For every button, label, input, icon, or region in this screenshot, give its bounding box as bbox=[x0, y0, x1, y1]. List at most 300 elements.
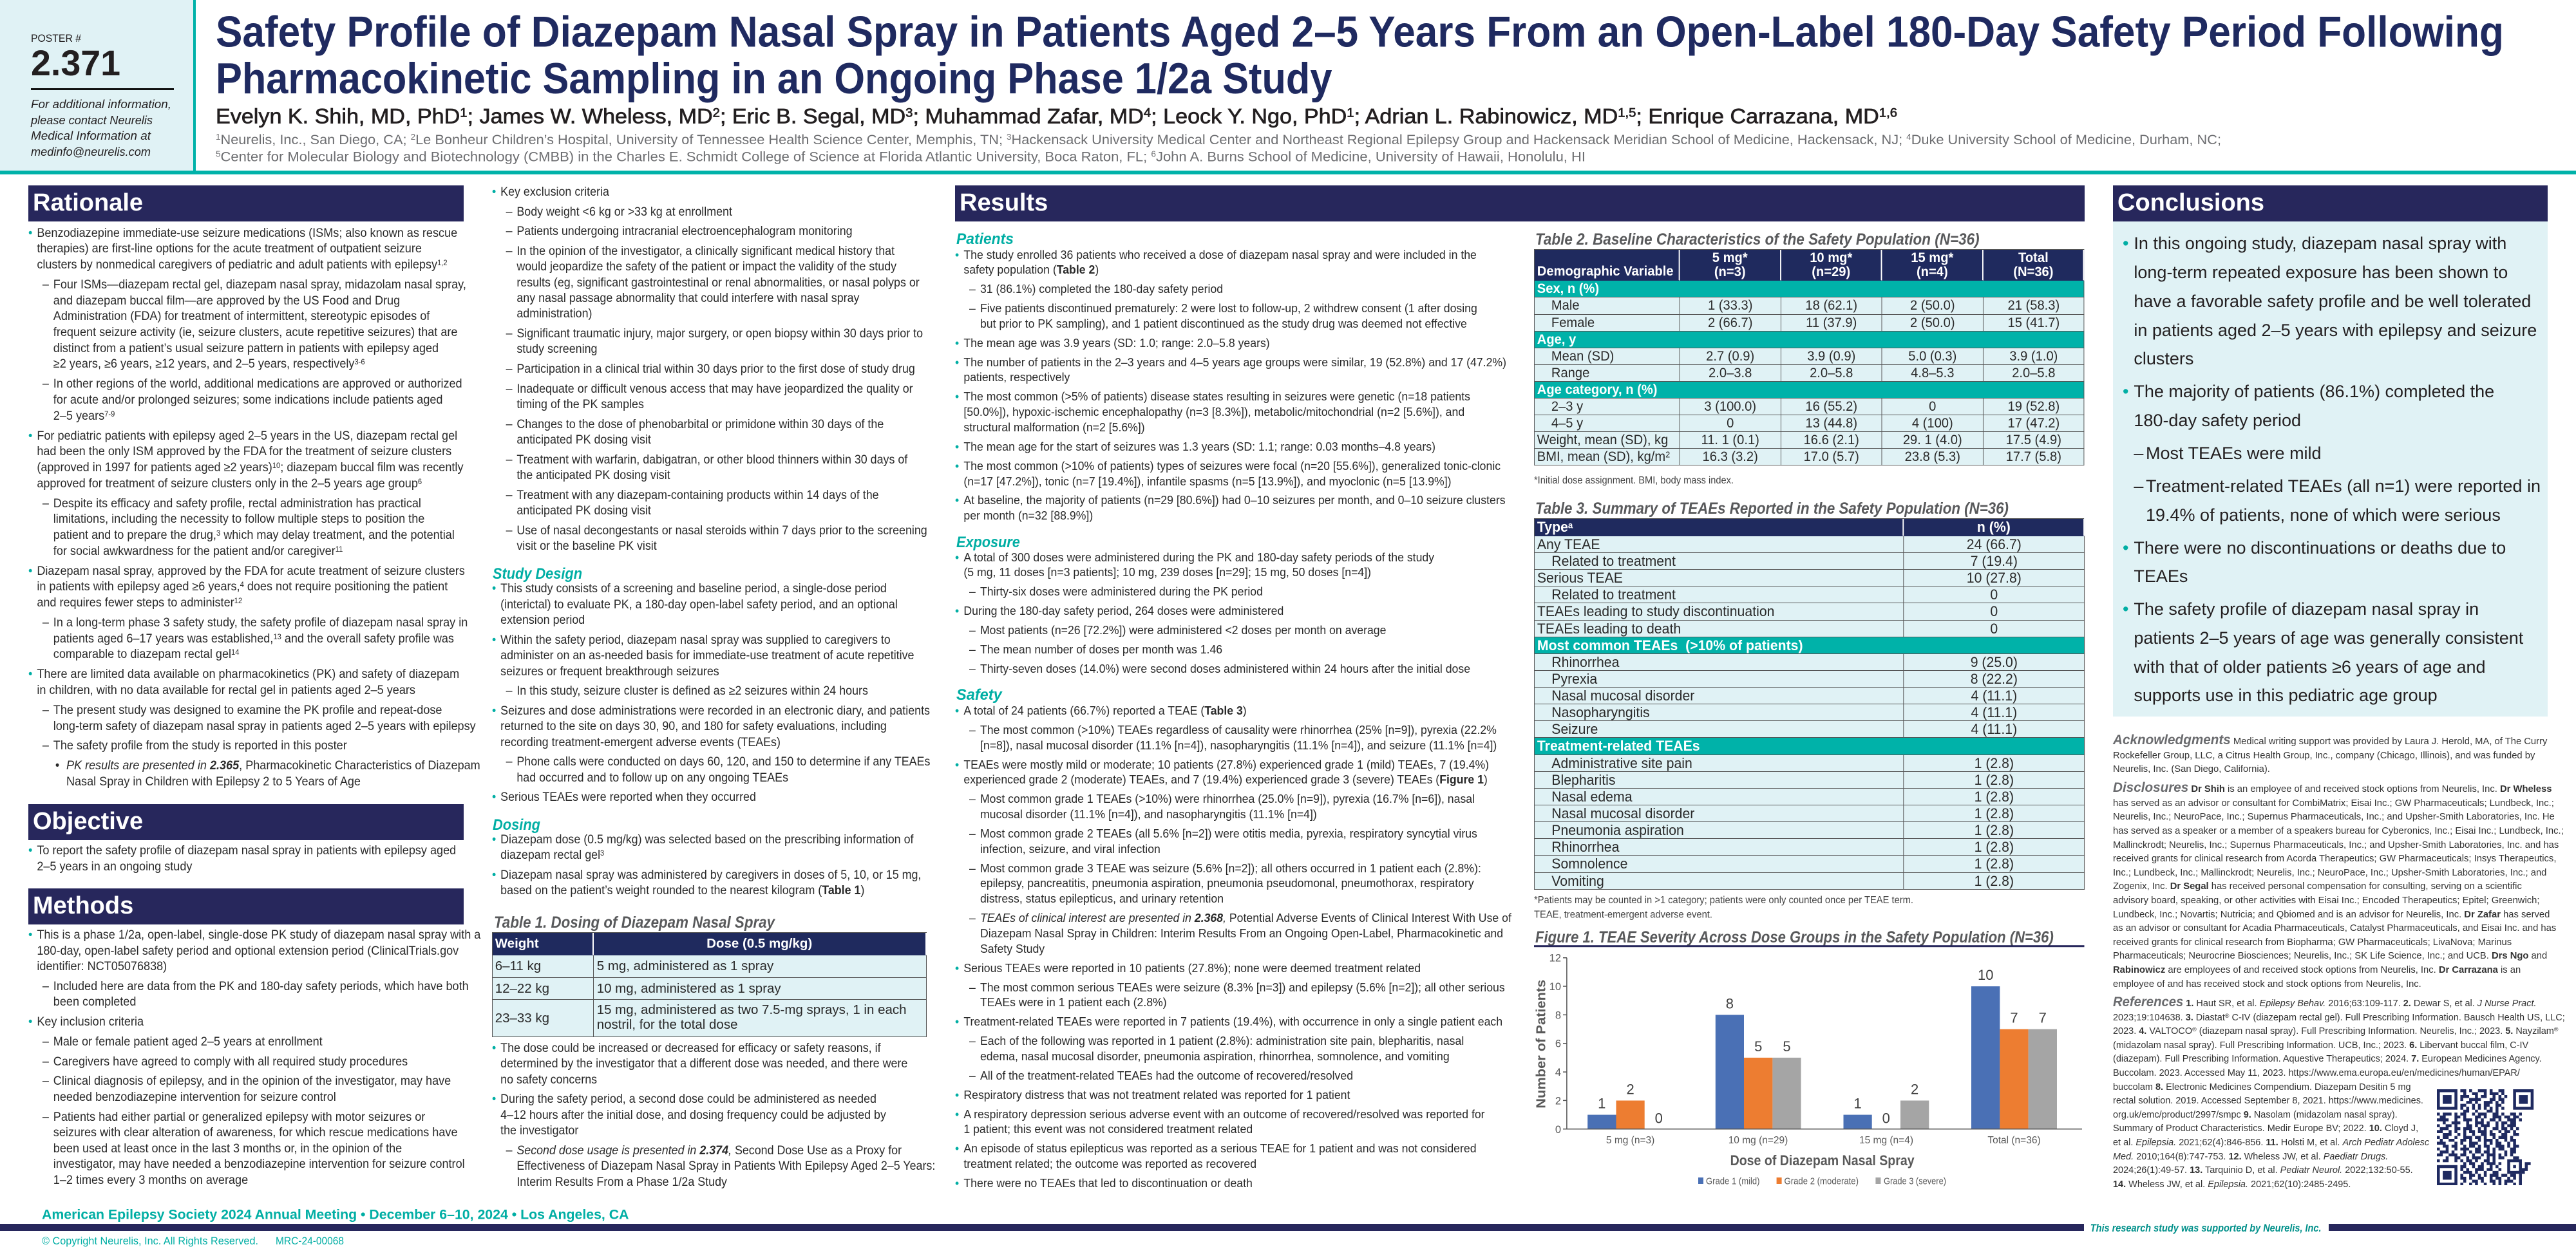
text block: patients: At baseline, the majority of patients (n=29 [80.6%]) had 0–10 seizures per month, and 0–10 seizure clusters bbox=[963, 493, 1505, 507]
text block: disclosures: Rabinowicz are employees of and received stock options from Neurelis, Inc. Dr Carrazana is an bbox=[2113, 964, 2521, 975]
footer bars bbox=[0, 1224, 2576, 1231]
panel: conclusions bbox=[2113, 185, 2548, 717]
table 2: baseline characteristics: 4.8–5.3 bbox=[1911, 366, 1954, 380]
y axis: 2 bbox=[1555, 1095, 1561, 1107]
table 3: summary of TEAEs: Nasal mucosal disorder bbox=[1551, 688, 1694, 704]
text block: rationale bullets: patients aged 6–17 years was established,13 and the overall safety profile was bbox=[53, 632, 454, 646]
text block: dosing bbox=[492, 832, 922, 899]
text block: study design: seizures or frequent breakthrough seizures bbox=[500, 665, 719, 679]
text block: patients: The most common (>10% of patients) types of seizures were focal (n=20 [55.6%]), generalized tonic-clonic bbox=[963, 459, 1501, 473]
table 1: dosing: Dose (0.5 mg/kg) bbox=[706, 936, 812, 951]
table 3: summary of TEAEs: TEAEs leading to death bbox=[1537, 621, 1681, 636]
text block: references: Summary of Product Characteristics. Medir Europe BV; 2022. 10. Cloyd J, bbox=[2113, 1123, 2418, 1134]
table 2: baseline characteristics: 17.0 (5.7) bbox=[1804, 449, 1859, 464]
text block: methods inclusion criteria: Included here are data from the PK and 180-day safety periods, which have both bbox=[53, 980, 469, 993]
panel: rationale bbox=[28, 185, 480, 789]
table 2: baseline characteristics: 2 (50.0) bbox=[1910, 298, 1955, 313]
text block: methods inclusion criteria: been used at least once in the last 3 months or, in the opinion of the bbox=[53, 1142, 402, 1156]
text block: objective: To report the safety profile of diazepam nasal spray in patients with epilepsy aged bbox=[37, 844, 456, 858]
bars bbox=[1587, 986, 2057, 1129]
text block: methods inclusion criteria: Caregivers have agreed to comply with all required study procedures bbox=[53, 1055, 408, 1069]
table 1: dosing: nostril, for the total dose bbox=[597, 1017, 737, 1031]
subheading: study design: Study Design bbox=[493, 565, 582, 583]
conclusion 2 sub-point b bbox=[2123, 472, 2541, 529]
value labels bbox=[1598, 967, 2047, 1127]
text block: dosing: based on the patient’s weight rounded to the nearest kilogram (Table 1) bbox=[500, 884, 864, 897]
conclusion 1: • bbox=[2123, 234, 2128, 253]
text block: key exclusion criteria: Body weight <6 kg or >33 kg at enrollment bbox=[516, 205, 732, 219]
x axis labels: Total (n=36) bbox=[1987, 1135, 2041, 1146]
text block: disclosures: Neurelis, Inc.; NeuroPace, Inc.; Supernus Pharmaceuticals, Inc.; and Upsher-Smith Laboratories, Inc. He bbox=[2113, 811, 2555, 822]
text block: dose adjustments bbox=[492, 1041, 922, 1190]
table 3: summary of TEAEs: Rhinorrhea bbox=[1551, 654, 1619, 670]
text block: key exclusion criteria: any nasal passage abnormality that could interfere with nasal spray bbox=[516, 292, 859, 305]
text block: references: 2024;26(1):49-57. 13. Tarquinio D, et al. Pediatr Neurol. 2022;132:50-55. bbox=[2113, 1165, 2413, 1176]
text block: disclosures bbox=[2113, 781, 2544, 989]
text block: safety: A respiratory depression serious adverse event with an outcome of recovered/resolved was reported for bbox=[963, 1107, 1484, 1121]
text block: methods inclusion criteria: been completed bbox=[53, 995, 136, 1009]
table 3: summary of TEAEs: Pyrexia bbox=[1551, 671, 1597, 687]
text block: rationale bullets: in children, with no data available for rectal gel in patients aged 2–5 years bbox=[37, 684, 415, 697]
table 1: dosing: 12–22 kg bbox=[495, 981, 549, 995]
table 3: summary of TEAEs: Pneumonia aspiration bbox=[1551, 822, 1684, 838]
text block: dosing: Diazepam dose (0.5 mg/kg) was selected based on the prescribing information of bbox=[500, 833, 913, 847]
panel: objective bbox=[28, 804, 464, 874]
value labels: 7 bbox=[2010, 1010, 2018, 1026]
text block: disclosures: advisory board, speaking, or other activities with Eisai Inc.; Encoded Therapeutics; Epitel; Greenwich; bbox=[2113, 895, 2539, 906]
table 2: baseline characteristics: 16.6 (2.1) bbox=[1804, 433, 1859, 447]
table 2: baseline characteristics: 5 mg* bbox=[1712, 250, 1748, 265]
text block: methods inclusion criteria bbox=[28, 928, 464, 1188]
panel: results bbox=[955, 185, 2085, 1196]
table 2: baseline characteristics: Age, y bbox=[1537, 332, 1576, 347]
table 3 footnote bbox=[1534, 886, 1917, 924]
text block: safety: Most common grade 1 TEAEs (>10%) were rhinorrhea (25.0% [n=9]), pyrexia (16.7% [n=6]), nasal bbox=[980, 792, 1475, 805]
text block: dose adjustments: During the safety period, a second dose could be administered as needed bbox=[500, 1092, 876, 1106]
text block: patients: Five patients discontinued prematurely: 2 were lost to follow-up, 2 withdrew consent (1 after dosing bbox=[980, 301, 1477, 315]
heading: results bbox=[955, 185, 2085, 221]
table 2: baseline characteristics: (n=3) bbox=[1714, 265, 1746, 279]
x axis labels: 15 mg (n=4) bbox=[1859, 1135, 1913, 1146]
text block: key exclusion criteria: study screening bbox=[516, 342, 597, 356]
table 2: baseline characteristics: 0 bbox=[1727, 416, 1734, 431]
conclusion 4 bbox=[2123, 595, 2541, 710]
text block: disclosures: employee of and has received stock and stock options from Neurelis, Inc. bbox=[2113, 979, 2421, 989]
table 3: summary of TEAEs: Serious TEAE bbox=[1537, 570, 1623, 586]
text block: disclosures: Pharmaceuticals; Neurocrine Biosciences; Neurelis, Inc.; SK Life Science, Inc.; and UCB. Drs Ngo and bbox=[2113, 950, 2547, 961]
table 2: baseline characteristics: 18 (62.1) bbox=[1805, 298, 1857, 313]
text block: study design: had occurred and to follow up on any ongoing TEAEs bbox=[516, 771, 788, 785]
text block: safety: Most common grade 3 TEAE was seizure (5.6% [n=2]); all others occurred in 1 patient each (2.8%): bbox=[980, 861, 1481, 875]
table 2: baseline characteristics: Demographic Variable bbox=[1537, 264, 1674, 279]
text block: dose adjustments: Second dose usage is presented in 2.374, Second Dose Use as a Proxy for bbox=[516, 1144, 902, 1158]
conclusion 4: with that of older patients ≥6 years of age and bbox=[2134, 657, 2486, 677]
table 2: baseline characteristics: 0 bbox=[1929, 399, 1936, 414]
text block: rationale bullets: In other regions of the world, additional medications are approved or authorized bbox=[53, 377, 462, 391]
conclusion 4: • bbox=[2123, 599, 2128, 619]
table 3: summary of TEAEs: 0 bbox=[1990, 586, 1998, 603]
text block: key exclusion criteria: Changes to the dose of phenobarbital or primidone within 30 days of the bbox=[516, 418, 884, 431]
table 2: baseline characteristics: Male bbox=[1551, 298, 1580, 313]
text block: rationale bullets: for social awkwardness for the patient and/or caregiver11 bbox=[53, 545, 343, 558]
table 2: baseline characteristics: (n=4) bbox=[1917, 265, 1948, 279]
text block: study design: extension period bbox=[500, 614, 585, 627]
table 3: summary of TEAEs: Typea bbox=[1537, 519, 1573, 535]
affiliations: 1Neurelis, Inc., San Diego, CA; 2Le Bonheur Children’s Hospital, University of Tennessee Health Science Center, Memphis, TN; 3Hackensack University Medical Center and Northeast Regional Epilepsy Group and Hackensack Meridian School of Medicine, Hackensack, NJ; 4Duke University School of Medicine, Durham, NC; bbox=[216, 131, 2221, 147]
text block: rationale bullets: had been the only ISM approved by the FDA for the treatment of seizure clusters bbox=[37, 445, 451, 458]
value labels: 1 bbox=[1598, 1096, 1605, 1112]
heading: conclusions bbox=[2113, 185, 2548, 221]
table 3: summary of TEAEs: Nasal mucosal disorder bbox=[1551, 805, 1694, 821]
conclusion 1: long-term repeated exposure has been shown to bbox=[2134, 263, 2508, 282]
table 2: baseline characteristics: BMI, mean (SD), kg/m2 bbox=[1537, 449, 1670, 464]
table 3: summary of TEAEs: n (%) bbox=[1977, 519, 2011, 535]
text block: exposure: Most patients (n=26 [72.2%]) were administered <2 doses per month on average bbox=[980, 623, 1386, 637]
text block: references: rectal solution. 2019. Accessed September 8, 2021. https://www.medicines. bbox=[2113, 1095, 2423, 1106]
text block: key exclusion criteria: Use of nasal decongestants or nasal steroids within 7 days prior to the screening bbox=[516, 524, 927, 538]
text block: key exclusion criteria: results (eg, significant gastrointestinal or renal abnormalities, or nasal polyps or bbox=[516, 276, 919, 290]
text block: rationale bullets: and requires fewer steps to administer12 bbox=[37, 596, 242, 610]
table 3: summary of TEAEs: 1 (2.8) bbox=[1975, 805, 2014, 821]
conclusion 2: • bbox=[2123, 382, 2128, 401]
poster number box: Medical Information at bbox=[31, 129, 151, 142]
text block: safety: Most common grade 2 TEAEs (all 5.6% [n=2]) were otitis media, pyrexia, respiratory syncytial virus bbox=[980, 827, 1477, 840]
table 2 footnote: *Initial dose assignment. BMI, body mass index. bbox=[1534, 475, 1734, 486]
table 2: baseline characteristics: (N=36) bbox=[2013, 265, 2053, 279]
conclusion 2 sub-point a: – bbox=[2134, 444, 2143, 463]
text block: rationale bullets: In a long-term phase 3 safety study, the safety profile of diazepam nasal spray in bbox=[53, 616, 468, 630]
table 2: baseline characteristics: 17.7 (5.8) bbox=[2006, 449, 2061, 464]
conclusion 2: The majority of patients (86.1%) completed the bbox=[2134, 382, 2494, 401]
table 2: baseline characteristics: 11. 1 (0.1) bbox=[1701, 433, 1759, 447]
text block: study design: Serious TEAEs were reported when they occurred bbox=[500, 791, 755, 804]
table 3: summary of TEAEs: 0 bbox=[1990, 621, 1998, 636]
table 1: dosing: 15 mg, administered as two 7.5-mg sprays, 1 in each bbox=[597, 1002, 907, 1017]
legend: Grade 2 (moderate) bbox=[1784, 1177, 1859, 1187]
conclusion 1: have a favorable safety profile and be well tolerated bbox=[2134, 292, 2531, 311]
text block: exposure: Thirty-six doses were administered during the PK period bbox=[980, 585, 1262, 598]
table 2: baseline characteristics: 2.7 (0.9) bbox=[1706, 349, 1754, 364]
table 2: baseline characteristics: 17 (47.2) bbox=[2007, 416, 2060, 431]
text block: references: Buccolam. 2023. Accessed May 11, 2023. https://www.ema.europa.eu/en/medicines/human/EPAR/ bbox=[2113, 1067, 2520, 1078]
table 2: baseline characteristics: 11 (37.9) bbox=[1806, 315, 1857, 330]
y axis: 8 bbox=[1555, 1009, 1561, 1021]
text block: study design: Seizures and dose administrations were recorded in an electronic diary, and patients bbox=[500, 704, 929, 718]
text block: safety: distress, status epilepticus, and urinary retention bbox=[980, 892, 1224, 905]
text block: dosing: diazepam rectal gel3 bbox=[500, 849, 604, 862]
text block: methods inclusion criteria: Patients had either partial or generalized epilepsy with motor seizures or bbox=[53, 1110, 425, 1124]
table 3: summary of TEAEs: 7 (19.4) bbox=[1971, 553, 2018, 569]
poster number box: please contact Neurelis bbox=[30, 113, 153, 127]
table 2: baseline characteristics: 1 (33.3) bbox=[1708, 298, 1752, 313]
text block: rationale bullets: clusters by nonmedical caregivers of pediatric and adult patients with epilepsy1,2 bbox=[37, 258, 448, 272]
text block: objective bbox=[28, 844, 456, 874]
table 2: baseline characteristics: 3.9 (0.9) bbox=[1807, 349, 1855, 364]
text block: key exclusion criteria: anticipated PK dosing visit bbox=[516, 433, 650, 447]
heading: objective bbox=[28, 804, 464, 840]
title: Pharmacokinetic Sampling in an Ongoing Phase 1/2a Study bbox=[216, 53, 1332, 103]
text block: key exclusion criteria: timing of the PK samples bbox=[516, 398, 643, 411]
table 3: summary of TEAEs: 4 (11.1) bbox=[1971, 704, 2017, 720]
text block: references: et al. Epilepsia. 2021;62(4):846-856. 11. Holsti M, et al. Arch Pediatr Adolesc bbox=[2113, 1137, 2429, 1148]
text block: exposure: A total of 300 doses were administered during the PK and 180-day safety periods of the study bbox=[963, 550, 1434, 564]
conclusion 4: The safety profile of diazepam nasal spray in bbox=[2134, 599, 2479, 619]
authors: Evelyn K. Shih, MD, PhD 1; James W. Wheless, MD 2; Eric B. Segal, MD 3; Muhammad Zafar, MD 4; Leock Y. Ngo, PhD 1; Adrian L. Rabinowicz, MD 1,5; Enrique Carrazana, MD 1,6 bbox=[216, 105, 1897, 128]
text block: rationale bullets: frequent seizure activity (ie, seizure clusters, acute repetitive seizures) that are bbox=[53, 326, 457, 339]
text block: references: 14. Wheless JW, et al. Epilepsia. 2021;62(10):2485-2495. bbox=[2113, 1179, 2351, 1190]
table 3 footnote: *Patients may be counted in >1 category; patients were only counted once per TEAE term. bbox=[1534, 895, 1913, 905]
legend: Grade 3 (severe) bbox=[1884, 1177, 1946, 1187]
text block: safety: Respiratory distress that was not treatment related was reported for 1 patient bbox=[963, 1088, 1350, 1102]
text block: rationale bullets: distinct from a patient’s usual seizure pattern in patients with epilepsy aged bbox=[53, 342, 439, 355]
text block: disclosures: has served as a speaker or a member of a speakers bureau for Cyberonics, Inc.; Eisai Inc.; Lundbeck, Inc.; bbox=[2113, 825, 2564, 836]
affiliations bbox=[216, 131, 2221, 165]
text block: patients: structural malformation (n=2 [5.6%]) bbox=[963, 420, 1144, 434]
text block: objective: 2–5 years in an ongoing study bbox=[37, 860, 192, 874]
text block: rationale bullets: (approved in 1997 for patients aged ≥2 years)10; diazepam buccal film was recently bbox=[37, 461, 463, 474]
y axis: 0 bbox=[1555, 1124, 1561, 1136]
text block: methods inclusion criteria: needed benzodiazepine intervention for seizure control bbox=[53, 1091, 336, 1104]
text block: dose adjustments: the investigator bbox=[500, 1124, 578, 1138]
text block: disclosures: received grants for clinical research from Biopharma; GW Pharmaceuticals; LivaNova; Marinus bbox=[2113, 937, 2512, 948]
conclusion 2 sub-point b: Treatment-related TEAEs (all n=1) were reported in bbox=[2146, 476, 2541, 496]
value labels: 1 bbox=[1853, 1096, 1862, 1112]
heading: methods bbox=[28, 888, 464, 924]
text block: study design: Phone calls were conducted on days 60, 120, and 150 to determine if any TEAEs bbox=[516, 755, 930, 769]
text block: patients: The study enrolled 36 patients who received a dose of diazepam nasal spray and were included in the bbox=[963, 247, 1476, 261]
text block: rationale bullets bbox=[28, 227, 480, 789]
text block: rationale bullets: Diazepam nasal spray, approved by the FDA for acute treatment of seizure clusters bbox=[37, 565, 465, 578]
table 3: summary of TEAEs: 1 (2.8) bbox=[1975, 789, 2014, 805]
text block: patients bbox=[954, 247, 1493, 523]
value labels: 0 bbox=[1655, 1111, 1663, 1127]
text block: patients: patients, respectively bbox=[963, 370, 1070, 384]
poster number box: POSTER # bbox=[31, 32, 81, 44]
y axis bbox=[1549, 953, 1567, 1136]
text block: key exclusion criteria: Treatment with any diazepam-containing products within 14 days of the bbox=[516, 489, 878, 502]
header band bbox=[0, 0, 2576, 175]
text block: safety: treatment related; the outcome was reported as recovered bbox=[963, 1157, 1256, 1170]
table 3: summary of TEAEs: 9 (25.0) bbox=[1971, 654, 2018, 670]
text block: acknowledgments bbox=[2113, 733, 2544, 775]
text block: key exclusion criteria: In the opinion of the investigator, a clinically significant medical history that bbox=[516, 245, 895, 258]
text block: dose adjustments: no safety concerns bbox=[500, 1073, 597, 1087]
text block: dose adjustments: The dose could be increased or decreased for efficacy or safety reasons, if bbox=[500, 1042, 880, 1055]
title: Safety Profile of Diazepam Nasal Spray in Patients Aged 2–5 Years From an Open-Label 180-Day Safety Period Following bbox=[216, 7, 2504, 56]
text block: exposure bbox=[954, 550, 1493, 677]
text block: safety: Each of the following was reported in 1 patient (2.8%): administration site pain, blepharitis, nasal bbox=[980, 1034, 1464, 1047]
conclusion 3: TEAEs bbox=[2134, 567, 2188, 586]
text block: safety: mucosal disorder (11.1% [n=4]), and nasopharyngitis (11.1% [n=4]) bbox=[980, 807, 1316, 821]
copyright: © Copyright Neurelis, Inc. All Rights Reserved. bbox=[42, 1235, 258, 1247]
text block: patients: The mean age for the start of seizures was 1.3 years (SD: 1.1; range: 0.03 months–4.8 years) bbox=[963, 440, 1435, 453]
table 2: baseline characteristics: 2.0–5.8 bbox=[1810, 366, 1853, 380]
text block: references: Med. 2010;164(8):747-753. 12. Wheless JW, et al. Paediatr Drugs. bbox=[2113, 1151, 2388, 1162]
text block: patients: (n=17 [47.2%]), tonic (n=7 [19.4%]), infantile spasms (n=5 [13.9%]), and myoclonic (n=5 [13.9%]) bbox=[963, 474, 1451, 488]
text block: safety: epilepsy, pancreatitis, pneumonia aspiration, pneumonia pseudomonal, pneumothorax, respiratory bbox=[980, 876, 1473, 890]
text block: safety: There were no TEAEs that led to discontinuation or death bbox=[963, 1176, 1252, 1190]
text block: safety: All of the treatment-related TEAEs had the outcome of recovered/resolved bbox=[980, 1069, 1353, 1082]
text block: patients: 31 (86.1%) completed the 180-day safety period bbox=[980, 282, 1223, 295]
conclusion 4: supports use in this pediatric age group bbox=[2134, 686, 2438, 705]
value labels: 8 bbox=[1726, 995, 1734, 1011]
subheading: dosing: Dosing bbox=[493, 816, 540, 834]
bar chart: TEAE severity bbox=[1534, 945, 2085, 1190]
x axis labels: 10 mg (n=29) bbox=[1728, 1135, 1788, 1146]
text block: references: References 1. Haut SR, et al. Epilepsy Behav. 2016;63:109-117. 2. Dewar S, et al. J Nurse Pract. bbox=[2113, 995, 2537, 1009]
table 3: summary of TEAEs: 8 (22.2) bbox=[1971, 671, 2018, 687]
x axis title: Dose of Diazepam Nasal Spray bbox=[1730, 1152, 1915, 1168]
text block: safety: infection, seizure, and viral infection bbox=[980, 842, 1160, 856]
text block: disclosures: Mallinckrodt; Neurelis, Inc.; Supernus Pharmaceuticals, Inc.; and Upsher-Smith Laboratories, Inc. and has bbox=[2113, 839, 2559, 850]
text block: dose adjustments: Interim Results From a Phase 1/2a Study bbox=[516, 1176, 726, 1189]
legend bbox=[1698, 1177, 1946, 1187]
value labels: 5 bbox=[1783, 1038, 1791, 1055]
table 3: summary of TEAEs bbox=[1534, 518, 2084, 890]
table 3 caption: Table 3. Summary of TEAEs Reported in the Safety Population (N=36) bbox=[1535, 500, 2009, 518]
conclusion 2: 180-day safety period bbox=[2134, 411, 2301, 430]
text block: rationale bullets: long-term safety of diazepam nasal spray in patients aged 2–5 years with epilepsy bbox=[53, 720, 476, 733]
heading: methods: Methods bbox=[33, 892, 133, 919]
conclusion 2 sub-point b: – bbox=[2134, 476, 2143, 496]
text block: rationale bullets: For pediatric patients with epilepsy aged 2–5 years in the US, diazepam rectal gel bbox=[37, 429, 457, 443]
text block: safety: The most common serious TEAEs were seizure (8.3% [n=3]) and epilepsy (5.6% [n=2]); all other serious bbox=[980, 980, 1504, 994]
text block: key exclusion criteria: administration) bbox=[516, 307, 592, 321]
table 2 caption: Table 2. Baseline Characteristics of the Safety Population (N=36) bbox=[1535, 230, 1980, 248]
table 3: summary of TEAEs: 4 (11.1) bbox=[1971, 721, 2017, 737]
table 2: baseline characteristics: 23.8 (5.3) bbox=[1905, 449, 1960, 464]
text block: study design bbox=[492, 581, 922, 806]
conclusion 2 bbox=[2123, 377, 2541, 435]
table 1: dosing: 5 mg, administered as 1 spray bbox=[597, 959, 773, 973]
text block: study design: In this study, seizure cluster is defined as ≥2 seizures within 24 hours bbox=[516, 684, 867, 698]
table 3: summary of TEAEs: Treatment-related TEAEs bbox=[1537, 738, 1700, 754]
text block: key exclusion criteria bbox=[492, 185, 922, 554]
table 2: baseline characteristics: Mean (SD) bbox=[1551, 349, 1614, 364]
table 1: dosing: 6–11 kg bbox=[495, 959, 541, 973]
conclusion 1: In this ongoing study, diazepam nasal spray with bbox=[2134, 234, 2506, 253]
text block: study design: Within the safety period, diazepam nasal spray was supplied to caregivers to bbox=[500, 633, 890, 647]
table 3: summary of TEAEs: 1 (2.8) bbox=[1975, 772, 2014, 788]
table 2: baseline characteristics: 13 (44.8) bbox=[1805, 416, 1857, 431]
conclusion 2 sub-point b: 19.4% of patients, none of which were serious bbox=[2146, 505, 2501, 525]
table 2: baseline characteristics: 16 (55.2) bbox=[1805, 399, 1857, 414]
text block: rationale bullets: Benzodiazepine immediate-use seizure medications (ISMs; also known as rescue bbox=[37, 227, 457, 239]
table 2: baseline characteristics: 2.0–3.8 bbox=[1709, 366, 1752, 380]
conclusion 3: • bbox=[2123, 538, 2128, 558]
table 2: baseline characteristics: 10 mg* bbox=[1810, 250, 1852, 265]
text block: disclosures: Zogenix, Inc. Dr Segal has received personal compensation for consulting, serving on a scientific bbox=[2113, 881, 2522, 892]
text block: patients: The number of patients in the 2–3 years and 4–5 years age groups were similar, 19 (52.8%) and 17 (47.2%) bbox=[963, 355, 1506, 369]
table 3: summary of TEAEs: 1 (2.8) bbox=[1975, 822, 2014, 838]
text block: acknowledgments: Acknowledgments Medical writing support was provided by Laura J. Herold, MA, of The Curry bbox=[2113, 733, 2547, 747]
value labels: 2 bbox=[1911, 1082, 1918, 1097]
panel: methods continued bbox=[492, 185, 930, 1192]
meeting line: American Epilepsy Society 2024 Annual Meeting • December 6–10, 2024 • Los Angeles, CA bbox=[42, 1206, 629, 1222]
conclusion 3 bbox=[2123, 534, 2541, 591]
text block: dosing: Diazepam nasal spray was administered by caregivers in doses of 5, 10, or 15 mg, bbox=[500, 868, 921, 882]
heading: results: Results bbox=[960, 189, 1048, 216]
text block: rationale bullets: in patients with epilepsy aged ≥6 years,4 does not require positioning the patient bbox=[37, 580, 448, 594]
text block: disclosures: received grants for clinical research from Acorda Therapeutics; GW Pharmaceuticals; Insys Therapeutics, bbox=[2113, 853, 2556, 864]
text block: rationale bullets: Despite its efficacy and safety profile, rectal administration has practical bbox=[53, 497, 421, 511]
text block: methods inclusion criteria: Male or female patient aged 2–5 years at enrollment bbox=[53, 1035, 323, 1049]
text block: exposure: During the 180-day safety period, 264 doses were administered bbox=[963, 604, 1283, 617]
text block: safety: Safety Study bbox=[980, 942, 1045, 955]
text block: key exclusion criteria: anticipated PK dosing visit bbox=[516, 504, 650, 518]
text block: study design: recording treatment-emergent adverse events (TEAEs) bbox=[500, 736, 780, 749]
table 3: summary of TEAEs: Related to treatment bbox=[1551, 553, 1676, 569]
table 2: baseline characteristics: 29. 1 (4.0) bbox=[1903, 433, 1962, 447]
table 1: dosing: 10 mg, administered as 1 spray bbox=[597, 981, 781, 995]
table 2: baseline characteristics: (n=29) bbox=[1812, 265, 1850, 279]
text block: key exclusion criteria: Patients undergoing intracranial electroencephalogram monitoring bbox=[516, 225, 852, 238]
text block: references: (midazolam nasal spray). Full Prescribing Information. UCB, Inc.; 2023. 6. Libervant buccal film, C-IV bbox=[2113, 1040, 2528, 1051]
text block: dose adjustments: 4–12 hours after the initial dose, and dosing frequency could be adjusted by bbox=[500, 1109, 886, 1122]
table 2: baseline characteristics: 4–5 y bbox=[1551, 416, 1583, 431]
text block: study design: (interictal) to evaluate PK, a 180-day open-label safety period, and an optional bbox=[500, 598, 897, 612]
text block: safety: experienced grade 2 (moderate) TEAEs, and 7 (19.4%) experienced grade 3 (severe) TEAEs (Figure 1) bbox=[963, 773, 1487, 786]
table 3: summary of TEAEs: Related to treatment bbox=[1551, 586, 1676, 603]
conclusion 3: There were no discontinuations or deaths due to bbox=[2134, 538, 2506, 558]
text block: methods inclusion criteria: identifier: NCT05076838) bbox=[37, 960, 167, 973]
text block: exposure: The mean number of doses per month was 1.46 bbox=[980, 642, 1222, 656]
text block: disclosures: has served as an advisor or consultant for CombiMatrix; Eisai Inc.; GW Pharmaceuticals; Lundbeck, Inc.; bbox=[2113, 798, 2554, 809]
text block: rationale bullets: and diazepam buccal film—are approved by the US Food and Drug bbox=[53, 294, 400, 308]
text block: disclosures: as an advisor or consultant for Acadia Pharmaceuticals, Catalyst Pharmaceuticals, and Eisai Inc. and has bbox=[2113, 923, 2556, 933]
heading: rationale: Rationale bbox=[33, 189, 143, 216]
legend: Grade 1 (mild) bbox=[1706, 1177, 1759, 1187]
text block: safety: A total of 24 patients (66.7%) reported a TEAE (Table 3) bbox=[963, 704, 1246, 717]
text block: key exclusion criteria: visit or the baseline PK visit bbox=[516, 539, 656, 553]
table 3: summary of TEAEs: Administrative site pain bbox=[1551, 755, 1692, 771]
table 3: summary of TEAEs: Nasal edema bbox=[1551, 789, 1633, 805]
y axis: 10 bbox=[1549, 981, 1561, 993]
table 2: baseline characteristics: Range bbox=[1551, 366, 1589, 380]
text block: key exclusion criteria: Treatment with warfarin, dabigatran, or other blood thinners within 30 days of bbox=[516, 453, 907, 467]
icon: QR code bbox=[2437, 1089, 2534, 1185]
table 2: baseline characteristics: 2 (66.7) bbox=[1708, 315, 1752, 330]
conclusion 4: patients 2–5 years of age was generally consistent bbox=[2134, 628, 2523, 648]
table 2: baseline characteristics bbox=[1534, 249, 2084, 465]
text block: acknowledgments: Rockefeller Group, LLC, a Citrus Health Group, Inc., company (Chicago, Illinois), and was funded by bbox=[2113, 750, 2535, 761]
conclusion 1: clusters bbox=[2134, 349, 2193, 368]
text block: disclosures: Inc.; Lundbeck, Inc.; Mallinckrodt; Neurelis, Inc.; NeuroPace, Inc.; Upsher-Smith Laboratories, Inc.; and bbox=[2113, 867, 2546, 878]
text block: safety: Diazepam Nasal Spray in Children: Interim Results From an Ongoing Open-Label, Pharmacokinetic and bbox=[980, 926, 1503, 940]
title bbox=[216, 7, 2504, 103]
text block: key exclusion criteria: Participation in a clinical trial within 30 days prior to the first dose of study drug bbox=[516, 362, 914, 376]
table 2: baseline characteristics: 2.0–5.8 bbox=[2012, 366, 2055, 380]
poster number box: medinfo@neurelis.com bbox=[31, 145, 151, 158]
conclusion 2 sub-point a: Most TEAEs were mild bbox=[2146, 444, 2322, 463]
heading: objective: Objective bbox=[33, 808, 143, 835]
value labels: 7 bbox=[2039, 1010, 2047, 1026]
table 3: summary of TEAEs: Blepharitis bbox=[1551, 772, 1616, 788]
table 1: dosing bbox=[492, 932, 927, 1037]
y axis: 12 bbox=[1549, 953, 1561, 964]
poster number box: 2.371 bbox=[31, 42, 120, 83]
text block: key exclusion criteria: Key exclusion criteria bbox=[500, 185, 609, 199]
table 3 footnote: TEAE, treatment-emergent adverse event. bbox=[1534, 909, 1712, 920]
text block: rationale bullets: Four ISMs—diazepam rectal gel, diazepam nasal spray, midazolam nasal spray, bbox=[53, 278, 466, 292]
text block: rationale bullets: There are limited data available on pharmacokinetics (PK) and safety of diazepam bbox=[37, 668, 459, 681]
text block: dose adjustments: determined by the investigator that a different dose was needed, and there were bbox=[500, 1057, 907, 1071]
y axis title: Number of Patients bbox=[1534, 980, 1548, 1109]
text block: references bbox=[2113, 995, 2535, 1190]
y axis: 6 bbox=[1555, 1038, 1561, 1050]
text block: safety: Treatment-related TEAEs were reported in 7 patients (19.4%), with occurrence in only a single patient each bbox=[963, 1015, 1502, 1028]
conclusion 1: in patients aged 2–5 years with epilepsy and seizure bbox=[2134, 321, 2537, 340]
